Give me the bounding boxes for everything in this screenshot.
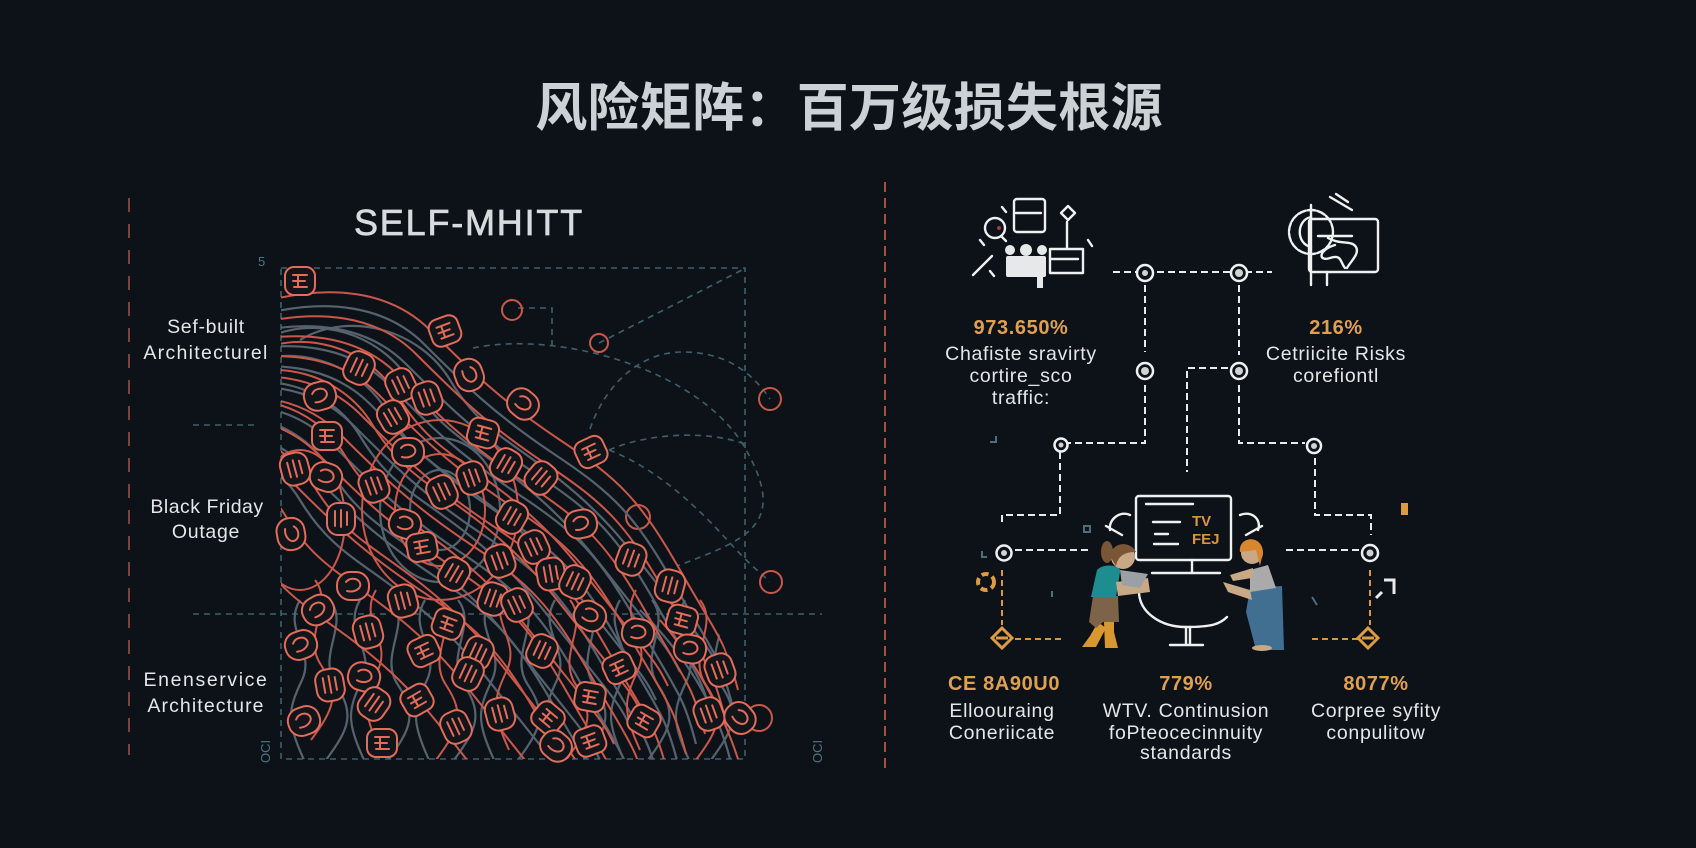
small corner arrow [1376, 580, 1394, 598]
stat bottom middle [1103, 673, 1269, 764]
stat bottom left: CE 8A90U0 [948, 673, 1060, 695]
panel: risk matrix [128, 198, 822, 763]
stat bottom middle: foPteocecinnuity [1109, 722, 1263, 744]
axis marks: OCI [258, 740, 273, 763]
stat bottom middle: standards [1140, 742, 1232, 764]
stat top left: traffic: [992, 387, 1050, 409]
stat bottom right: conpulitow [1326, 722, 1426, 744]
panel: root cause flow [945, 194, 1441, 764]
matrix heading: SELF-MHITT [354, 202, 584, 243]
icon: team and tools [973, 199, 1092, 288]
row label: self-built [143, 316, 269, 364]
row label: microservice: Architecture [147, 695, 265, 717]
row label: microservice [144, 669, 268, 717]
monitor label [1192, 513, 1220, 548]
row separators [193, 425, 822, 614]
stat bottom middle: 779% [1159, 673, 1213, 695]
stat bottom right [1311, 673, 1441, 744]
row label: self-built: Architecturel [143, 342, 269, 364]
axis marks: 5 [258, 254, 265, 269]
monitor [1106, 496, 1262, 645]
stat top right [1266, 317, 1406, 387]
axis marks: OCI [810, 740, 825, 763]
risk item cluster [274, 267, 761, 767]
stat bottom left: Elloouraing [949, 700, 1055, 722]
stat top left: Chafiste sravirty [945, 343, 1097, 365]
stat top left [945, 317, 1097, 409]
orange diamond nodes [992, 628, 1378, 648]
icon: gear and brain [1289, 194, 1378, 285]
stat top left: cortire_sco [969, 365, 1073, 387]
small teal marks [982, 436, 1317, 605]
row label: microservice: Enenservice [144, 669, 268, 691]
stat bottom left [948, 673, 1060, 744]
stat bottom right: Corpree syfity [1311, 700, 1441, 722]
title: 风险矩阵：百万级损失根源 [535, 80, 1163, 138]
flow nodes [996, 265, 1378, 561]
stat top left: 973.650% [974, 317, 1068, 339]
row label: black friday [150, 496, 264, 543]
row label: black friday: Outage [172, 521, 240, 543]
stat bottom right: 8077% [1343, 673, 1409, 695]
stat top right: 216% [1309, 317, 1363, 339]
panel divider [884, 182, 886, 768]
stat bottom left: Coneriicate [949, 722, 1055, 744]
tangled risk curves [281, 291, 739, 759]
axis marks [258, 254, 825, 763]
decorative small orange marks [978, 505, 1406, 590]
left axis dashed line [128, 198, 130, 755]
illustration: monitor and two people [1082, 496, 1284, 651]
row label: self-built: Sef-built [167, 316, 245, 338]
dashed connectors [1002, 272, 1371, 550]
matrix frame [281, 268, 745, 759]
isolated risk markers [502, 300, 782, 731]
dashed risk arcs [473, 270, 770, 582]
monitor label: TV [1192, 513, 1211, 530]
stat bottom middle: WTV. Continusion [1103, 700, 1269, 722]
stat top right: corefiontl [1293, 365, 1379, 387]
stat top right: Cetriicite Risks [1266, 343, 1406, 365]
person left [1082, 541, 1150, 648]
row label: black friday: Black Friday [150, 496, 264, 518]
monitor label: FEJ [1192, 531, 1220, 548]
orange connectors [1002, 570, 1370, 639]
person right [1223, 539, 1284, 651]
